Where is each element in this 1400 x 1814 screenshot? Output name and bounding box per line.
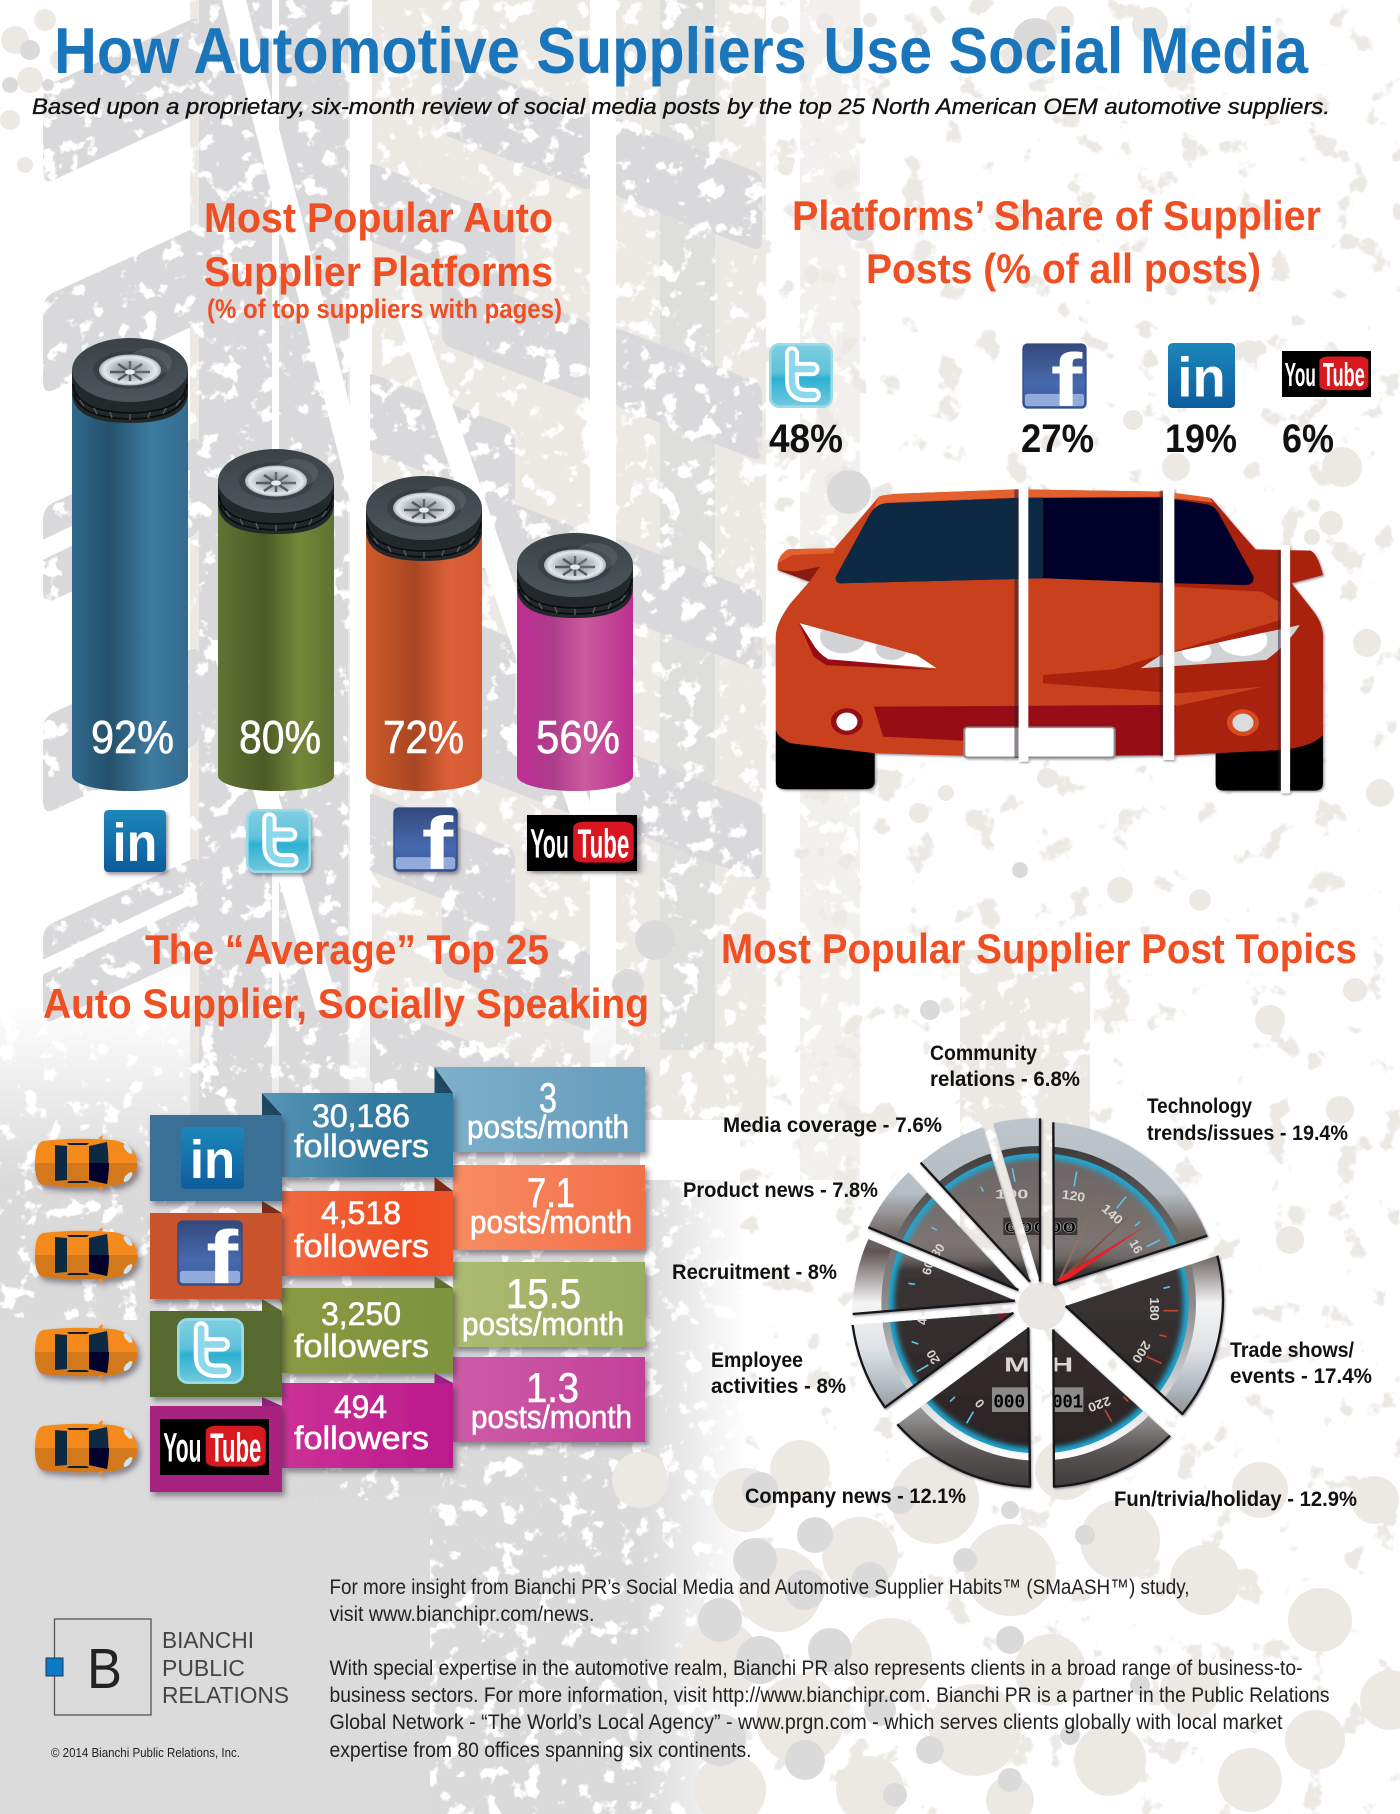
chart: speedometer pie: 0 — [972, 1396, 988, 1410]
icon: orange car 1 — [35, 1135, 137, 1191]
label: technology trends: trends/issues - 19.4% — [1147, 1122, 1348, 1145]
row: YouTube posts/month: posts/month — [471, 1399, 632, 1435]
chart: speedometer pie: 220 — [1086, 1393, 1113, 1415]
row: LinkedIn posts/month: posts/month — [467, 1109, 629, 1145]
text: Tube — [578, 822, 629, 867]
tab: Facebook: f — [206, 1216, 239, 1300]
icon: orange car 3 — [35, 1324, 137, 1380]
icon: Twitter — [247, 810, 310, 872]
row: YouTube posts/month: 1.3 — [526, 1364, 579, 1411]
heading: average supplier: The “Average” Top 25 — [145, 926, 549, 973]
row: LinkedIn followers: 30,186 — [312, 1098, 410, 1134]
row: Facebook posts/month: 7.1 — [527, 1169, 575, 1216]
bar: Facebook 72%: 72% — [383, 711, 464, 763]
row: Twitter followers: 3,250 — [321, 1296, 401, 1332]
label: trade shows: events - 17.4% — [1230, 1365, 1372, 1388]
icon: LinkedIn: in — [1177, 347, 1226, 409]
row: Facebook followers — [262, 1177, 453, 1276]
row: Facebook posts/month: posts/month — [470, 1204, 632, 1240]
row: YouTube posts/month — [453, 1357, 645, 1442]
panel: most popular platforms — [72, 194, 637, 885]
icon: orange car 4 — [35, 1420, 137, 1476]
row: LinkedIn followers: followers — [294, 1128, 429, 1164]
tab: LinkedIn: in — [190, 1130, 235, 1190]
row: LinkedIn posts/month: 3 — [539, 1074, 557, 1121]
illustration: red car split by share — [776, 485, 1323, 793]
label: community relations: relations - 6.8% — [930, 1068, 1080, 1091]
percentages: 6% — [1282, 417, 1334, 461]
label: recruitment: Recruitment - 8% — [672, 1261, 837, 1284]
logo: Bianchi Public Relations — [46, 1619, 289, 1715]
logo: Bianchi Public Relations: PUBLIC — [162, 1655, 245, 1681]
chart: speedometer pie: MPH — [1004, 1355, 1073, 1377]
logo: Bianchi Public Relations: RELATIONS — [162, 1682, 289, 1708]
percentages: 19% — [1165, 417, 1237, 461]
title: How Automotive Suppliers Use Social Media — [54, 14, 1309, 87]
chart: speedometer pie: 80 — [928, 1241, 948, 1261]
row: Twitter posts/month — [453, 1262, 645, 1347]
icon: Facebook — [1023, 338, 1086, 422]
icon: YouTube: You — [530, 822, 569, 867]
hub gap backdrop — [1018, 1282, 1066, 1330]
label: trade shows — [1230, 1339, 1372, 1388]
chart: speedometer pie: 000 — [993, 1391, 1025, 1413]
logo: Bianchi Public Relations: B — [87, 1637, 122, 1701]
footer text: For more insight from Bianchi PR’s Social Media and Automotive Supplier Habits™ (SMaASH™) study, — [330, 1576, 1190, 1599]
icon: Facebook: f — [422, 802, 454, 885]
bar: LinkedIn 92% — [72, 338, 188, 791]
chart: speedometer pie: 100 — [995, 1187, 1028, 1201]
chart: speedometer pie: 20 — [924, 1347, 943, 1366]
row: YouTube followers: followers — [294, 1420, 429, 1456]
heading: most popular platforms: Supplier Platforms — [204, 248, 553, 295]
row: Twitter posts/month: posts/month — [462, 1306, 624, 1342]
icon: orange car 2 — [35, 1227, 137, 1283]
subtitle: Based upon a proprietary, six-month review of social media posts by the top 25 North American OEM automotive suppliers. — [32, 94, 1330, 119]
label: employee activities — [711, 1349, 846, 1398]
chart: speedometer pie: 200 — [1129, 1338, 1153, 1366]
heading: most popular platforms — [204, 194, 562, 324]
row: Twitter posts/month: 15.5 — [506, 1270, 581, 1317]
row: Facebook followers: 4,518 — [321, 1195, 401, 1231]
bar: Twitter 80% — [218, 449, 334, 791]
chart: speedometer pie: 001 — [1052, 1391, 1083, 1413]
bar: Twitter 80%: 80% — [239, 711, 321, 763]
heading: most popular platforms: Most Popular Auto — [204, 194, 553, 241]
tab: Facebook — [150, 1213, 282, 1300]
panel: platforms' share of posts — [769, 192, 1371, 793]
label: community relations: Community — [930, 1042, 1037, 1065]
row: LinkedIn followers — [262, 1093, 453, 1177]
label: employee activities: activities - 8% — [711, 1375, 846, 1398]
label: technology trends: Technology — [1147, 1095, 1252, 1118]
chart: speedometer pie: 00000 — [1004, 1220, 1077, 1238]
heading: post topics: Most Popular Supplier Post Topics — [721, 925, 1357, 972]
heading: platforms' share: Platforms’ Share of Supplier — [792, 192, 1321, 239]
heading: average supplier: Auto Supplier, Socially Speaking — [43, 980, 649, 1027]
bar: Facebook 72% — [366, 476, 482, 791]
percentages: 48% — [769, 417, 843, 461]
heading: platforms' share — [792, 192, 1321, 292]
percentages: 27% — [1021, 417, 1094, 461]
icon: YouTube — [1282, 351, 1371, 397]
row: Twitter followers: followers — [294, 1328, 429, 1364]
heading: platforms' share: Posts (% of all posts) — [866, 245, 1261, 292]
tab: LinkedIn — [150, 1115, 282, 1201]
footer text: With special expertise in the automotive realm, Bianchi PR also represents clients in a broad range of business-to- — [330, 1657, 1302, 1680]
bottom grey field — [0, 1000, 750, 1814]
percentages — [769, 417, 1334, 461]
label: company news: Company news - 12.1% — [745, 1485, 966, 1508]
bar: YouTube 56% — [517, 533, 633, 791]
logo: Bianchi Public Relations: BIANCHI — [162, 1627, 254, 1653]
row: YouTube followers — [262, 1373, 453, 1468]
row: Facebook followers: followers — [294, 1228, 429, 1264]
icon: YouTube: You — [1285, 356, 1316, 393]
label: trade shows: Trade shows/ — [1230, 1339, 1354, 1362]
tab: YouTube — [150, 1406, 282, 1492]
label: technology trends — [1147, 1095, 1348, 1145]
chart: speedometer pie: 60 — [920, 1259, 937, 1276]
heading: average supplier — [43, 926, 649, 1027]
row: LinkedIn posts/month — [434, 1067, 645, 1152]
chart: speedometer pie: 40 — [916, 1311, 930, 1325]
panel: most popular post topics — [672, 925, 1372, 1511]
label: fun trivia holiday: Fun/trivia/holiday - 12.9% — [1114, 1488, 1357, 1511]
bar: YouTube 56%: 56% — [536, 711, 620, 763]
chart: speedometer pie — [851, 1118, 1227, 1491]
chart: speedometer pie: 140 — [1099, 1201, 1125, 1228]
chart: speedometer pie: 180 — [1147, 1297, 1161, 1321]
footer text: visit www.bianchipr.com/news. — [330, 1603, 594, 1626]
icon: Facebook: f — [1051, 338, 1084, 422]
chart: speedometer pie: 16 — [1126, 1237, 1145, 1256]
icon: YouTube — [527, 815, 637, 871]
label: community relations — [930, 1042, 1080, 1091]
row: YouTube followers: 494 — [334, 1389, 387, 1425]
row: Facebook posts/month — [453, 1165, 645, 1250]
footer text: Global Network - “The World’s Local Agency” - www.prgn.com - which serves clients globally with local market — [330, 1711, 1283, 1734]
footer text: expertise from 80 offices spanning six continents. — [330, 1739, 752, 1762]
footer text — [330, 1576, 1330, 1762]
panel: the average top 25 auto supplier: Tube — [210, 1426, 261, 1471]
heading: most popular platforms: (% of top suppliers with pages) — [207, 294, 562, 324]
bar: LinkedIn 92%: 92% — [91, 711, 174, 763]
icon: LinkedIn: in — [113, 814, 157, 873]
icon: Twitter — [770, 344, 832, 407]
icon: Facebook — [394, 802, 457, 885]
panel: the average top 25 auto supplier — [35, 926, 649, 1492]
chart: speedometer pie: 120 — [1061, 1188, 1086, 1205]
label: product news: Product news - 7.8% — [683, 1179, 878, 1202]
tab: Twitter — [150, 1311, 282, 1397]
tab: YouTube: You — [163, 1426, 201, 1471]
copyright: © 2014 Bianchi Public Relations, Inc. — [51, 1746, 240, 1760]
label: media coverage: Media coverage - 7.6% — [723, 1114, 942, 1137]
footer text: business sectors. For more information, visit http://www.bianchipr.com. Bianchi PR is a partner in the Public Relations — [330, 1684, 1330, 1707]
label: employee activities: Employee — [711, 1349, 803, 1372]
row: Twitter followers — [262, 1276, 453, 1373]
